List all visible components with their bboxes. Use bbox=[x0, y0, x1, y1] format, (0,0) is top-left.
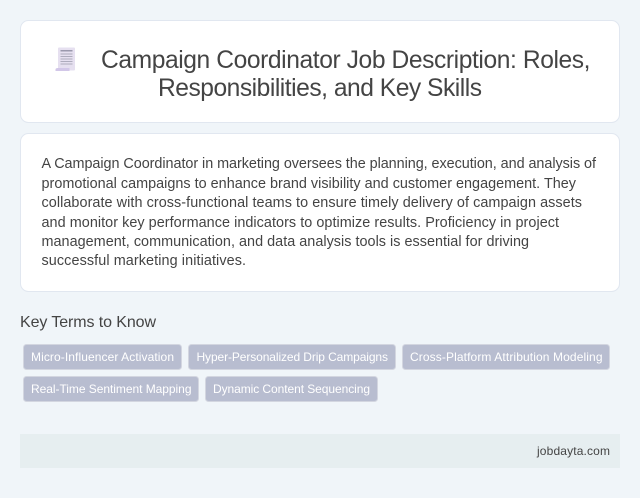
text block: description: promotional campaigns to enhance brand visibility and customer engagement. They bbox=[42, 176, 577, 192]
text block: description: collaborate with cross-functional teams to ensure timely delivery of campaign assets bbox=[42, 195, 582, 211]
chip: Dynamic Content Sequencing bbox=[206, 376, 378, 402]
text block: description: and monitor key performance indicators to optimize results. Proficiency in project bbox=[42, 215, 559, 231]
title bbox=[101, 47, 590, 102]
chip: Real-Time Sentiment Mapping: Real-Time Sentiment Mapping bbox=[31, 382, 192, 396]
chip: Hyper-Personalized Drip Campaigns bbox=[188, 344, 396, 370]
heading: key terms: Key Terms to Know bbox=[20, 314, 156, 331]
chip: Micro-Influencer Activation: Micro-Influencer Activation bbox=[31, 350, 174, 364]
footer: jobdayta.com bbox=[536, 444, 610, 458]
text block: description: successful marketing initiatives. bbox=[42, 253, 246, 269]
title: Responsibilities, and Key Skills bbox=[158, 75, 482, 102]
chip: Cross-Platform Attribution Modeling bbox=[402, 344, 610, 370]
icon: document scroll bbox=[56, 48, 75, 71]
footer bbox=[20, 434, 620, 468]
chip: Cross-Platform Attribution Modeling: Cross-Platform Attribution Modeling bbox=[410, 350, 602, 364]
panel: description bbox=[20, 134, 620, 292]
chip: Dynamic Content Sequencing: Dynamic Content Sequencing bbox=[213, 382, 370, 396]
text block: description: A Campaign Coordinator in marketing oversees the planning, execution, and analysis of bbox=[42, 156, 597, 172]
title: Campaign Coordinator Job Description: Roles, bbox=[101, 47, 590, 74]
text block: description: management, communication, and data analysis tools is essential for driving bbox=[42, 234, 529, 250]
panel: header bbox=[20, 20, 620, 122]
chip: Real-Time Sentiment Mapping bbox=[24, 376, 198, 402]
chip: Micro-Influencer Activation bbox=[24, 344, 182, 370]
chip: Hyper-Personalized Drip Campaigns: Hyper-Personalized Drip Campaigns bbox=[196, 350, 388, 364]
text block: description bbox=[42, 156, 597, 269]
